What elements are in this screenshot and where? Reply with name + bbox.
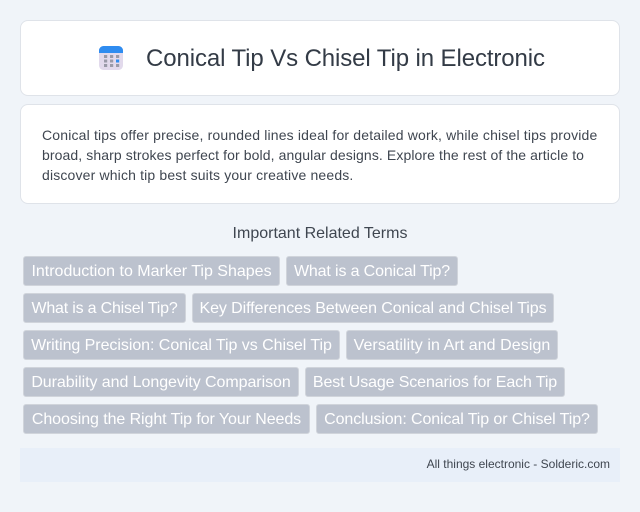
summary text: discover which tip best suits your creative needs.	[42, 167, 353, 183]
tag	[23, 256, 280, 286]
tag	[305, 367, 565, 397]
tag: What is a Chisel Tip?	[31, 300, 178, 317]
footer text: All things electronic - Solderic.com	[427, 457, 610, 471]
summary text: broad, sharp strokes perfect for bold, angular designs. Explore the rest of the article to	[42, 147, 584, 163]
icon: calendar	[99, 46, 123, 70]
tag: Conclusion: Conical Tip or Chisel Tip?	[324, 411, 590, 428]
tag	[316, 404, 598, 434]
tag: What is a Conical Tip?	[294, 263, 450, 280]
panel: title card	[20, 20, 620, 96]
tag	[346, 330, 558, 360]
tag	[23, 367, 299, 397]
summary text: Conical tips offer precise, rounded lines ideal for detailed work, while chisel tips provide	[42, 127, 597, 143]
heading: related terms: Important Related Terms	[233, 225, 407, 242]
tag list	[23, 256, 598, 434]
summary text	[42, 127, 597, 183]
tag	[286, 256, 458, 286]
tag: Choosing the Right Tip for Your Needs	[32, 411, 301, 428]
tag: Durability and Longevity Comparison	[31, 374, 291, 391]
tag: Writing Precision: Conical Tip vs Chisel Tip	[31, 337, 332, 354]
tag: Introduction to Marker Tip Shapes	[31, 263, 272, 280]
footer bar	[20, 448, 620, 482]
tag: Best Usage Scenarios for Each Tip	[313, 374, 557, 391]
tag	[192, 293, 554, 323]
tag	[23, 293, 186, 323]
panel: summary card	[20, 104, 620, 204]
tag	[23, 330, 340, 360]
tag	[23, 404, 310, 434]
tag: Versatility in Art and Design	[354, 337, 550, 354]
tag: Key Differences Between Conical and Chisel Tips	[199, 300, 546, 317]
title: Conical Tip Vs Chisel Tip in Electronic	[146, 45, 545, 72]
